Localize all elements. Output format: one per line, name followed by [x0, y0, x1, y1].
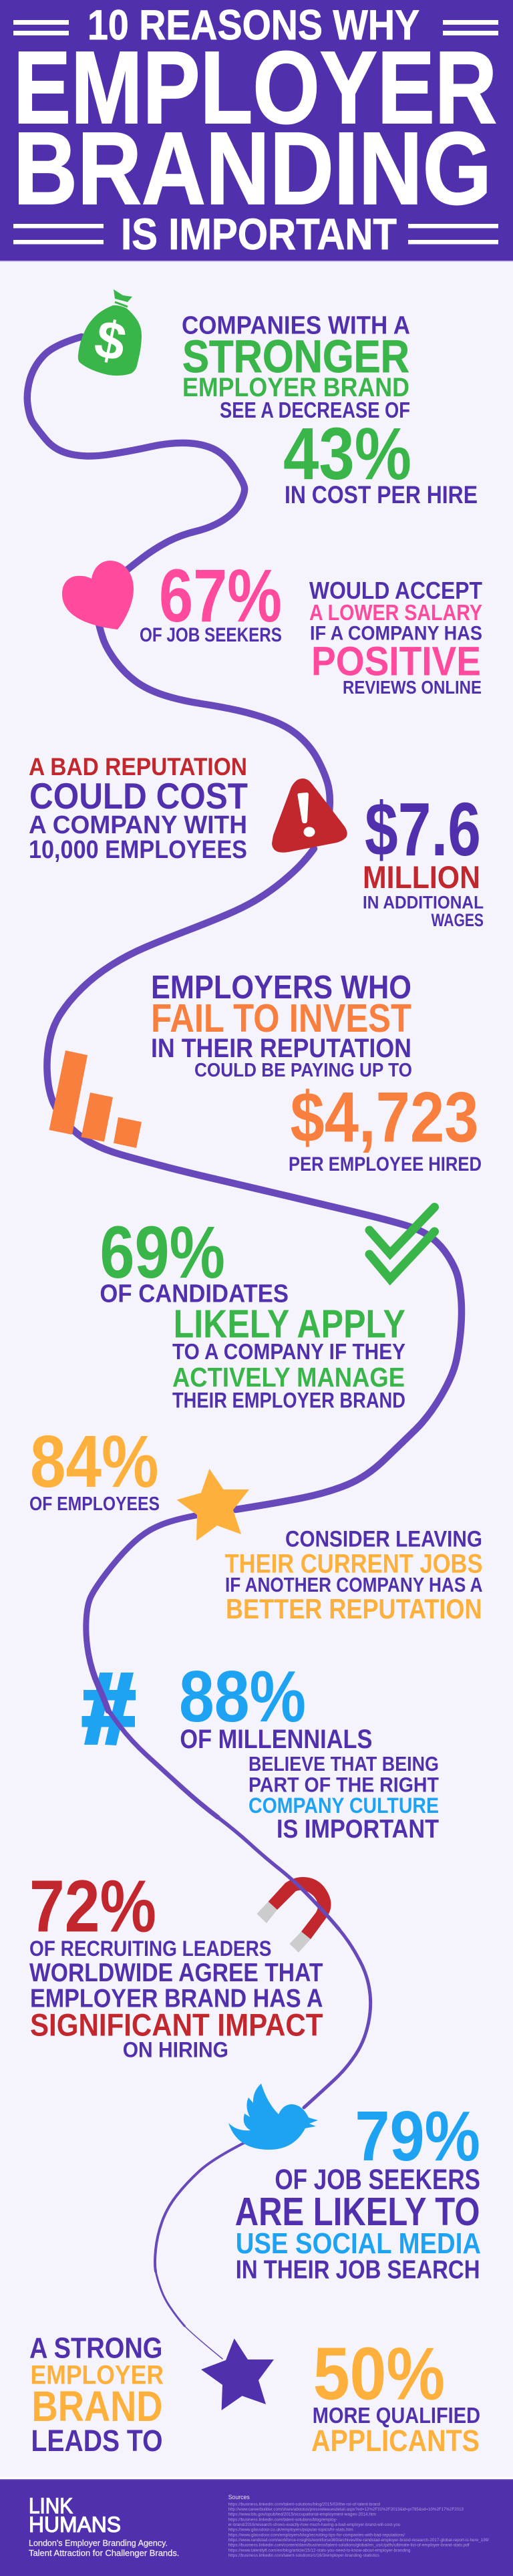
- text: applicants: APPLICANTS: [311, 2424, 480, 2458]
- sources list: https://business.linkedin.com/talent-solutions/c/16/3/employer-branding-statistics: [228, 2553, 380, 2558]
- text: a lower salary: A LOWER SALARY: [309, 600, 482, 625]
- text: would accept: WOULD ACCEPT: [309, 577, 482, 604]
- text: of job seekers: OF JOB SEEKERS: [140, 624, 282, 646]
- text: part of the right: PART OF THE RIGHT: [248, 1773, 439, 1797]
- decorative title bars top: [13, 20, 498, 35]
- sources list: https://business.linkedin.com/talent-solutions/blog/2015/03/the-roi-of-talent-brand: [228, 2502, 380, 2507]
- reason 1 text block: [182, 311, 478, 509]
- sources list: https://www.bls.gov/opub/ted/2015/occupational-employment-wages-2014.htm: [228, 2513, 376, 2517]
- reason 10 text block: [29, 2333, 480, 2458]
- text: in their reputation: IN THEIR REPUTATION: [151, 1034, 411, 1063]
- text: employers who: EMPLOYERS WHO: [151, 970, 411, 1006]
- text: more qualified: MORE QUALIFIED: [313, 2404, 480, 2428]
- text: brand: BRAND: [32, 2382, 163, 2430]
- sources list: https://www.glassdoor.co.uk/employers/popular-topics/hr-stats.htm: [228, 2528, 353, 2533]
- text: better reputation: BETTER REPUTATION: [226, 1593, 482, 1624]
- heading line: 10 reasons why: 10 REASONS WHY: [88, 2, 419, 49]
- icon: money bag: [78, 289, 142, 376]
- tagline: Talent Attraction for Challenger Brands.: [29, 2548, 179, 2558]
- tagline: London's Employer Branding Agency.: [29, 2538, 168, 2548]
- text: could be paying up to: COULD BE PAYING UP TO: [194, 1060, 412, 1081]
- text: companies with a: COMPANIES WITH A: [182, 311, 410, 339]
- text: employer: EMPLOYER: [31, 2361, 164, 2390]
- text: of employees: OF EMPLOYEES: [29, 1493, 160, 1515]
- logo: link humans: LINK: [29, 2494, 73, 2518]
- text: million: MILLION: [363, 860, 480, 895]
- text: in additional: IN ADDITIONAL: [363, 893, 484, 913]
- reason 8 text block: [29, 1866, 323, 2061]
- header banner: [0, 0, 513, 262]
- sources list: https://www.randstad.com/workforce-insights/workforce360/archives/the-randstad-employer-brand-research-2017-global-report-is-here_199/: [228, 2538, 489, 2543]
- text: likely apply: LIKELY APPLY: [174, 1302, 405, 1346]
- reason 3 text block: [29, 753, 484, 930]
- stat: 84%: 84%: [30, 1421, 159, 1503]
- footer band: [0, 2477, 513, 2576]
- text: of millennials: OF MILLENNIALS: [180, 1725, 372, 1754]
- stat: 72%: 72%: [29, 1866, 156, 1948]
- sources list: http://www.careerbuilder.com/share/aboutus/pressreleasesdetail.aspx?ed=12%2F31%2F2013&id=pr785&sd=10%2F17%2F2013: [228, 2507, 464, 2512]
- sources list: https://business.linkedin.com/talent-solutions/blog/employ-: [228, 2517, 337, 2522]
- stat: 67%: 67%: [159, 554, 282, 637]
- icon: twitter bird: [228, 2084, 318, 2150]
- icon: money bag: $: [90, 308, 131, 373]
- text: believe that being: BELIEVE THAT BEING: [248, 1752, 439, 1775]
- icon: magnet: [256, 1877, 331, 1953]
- reason 9 text block: [235, 2097, 481, 2285]
- text: if a company has: IF A COMPANY HAS: [310, 623, 482, 644]
- text: a company with: A COMPANY WITH: [29, 811, 247, 839]
- text: leads to: LEADS TO: [31, 2424, 163, 2458]
- logo: link humans: HUMANS: [29, 2513, 121, 2537]
- text: wages: WAGES: [432, 910, 484, 930]
- reason 4 text block: [151, 970, 482, 1175]
- icon: double check mark: [369, 1207, 434, 1279]
- stat: 79%: 79%: [355, 2097, 480, 2176]
- reason 5 text block: [100, 1211, 405, 1413]
- text: stronger: STRONGER: [182, 331, 409, 382]
- text: is important: IS IMPORTANT: [277, 1815, 439, 1844]
- text: reviews online: REVIEWS ONLINE: [343, 677, 482, 698]
- text: employer brand has a: EMPLOYER BRAND HAS A: [30, 1985, 323, 2013]
- stat: 50%: 50%: [313, 2333, 445, 2416]
- reason 6 text block: [29, 1421, 482, 1624]
- icon: falling bar chart: [49, 1050, 142, 1148]
- text: use social media: USE SOCIAL MEDIA: [236, 2228, 481, 2260]
- icon: star amber: [176, 1469, 249, 1541]
- decorative title bars bottom: [13, 224, 498, 245]
- sources list: https://business.linkedin.com/content/dam/business/talent-solutions/global/en_us/c/pdfs/ultimate-list-of-employer-brand-stats.pdf: [228, 2543, 470, 2548]
- text: significant impact: SIGNIFICANT IMPACT: [30, 2007, 323, 2042]
- text: fail to invest: FAIL TO INVEST: [151, 996, 411, 1040]
- reason 7 text block: [179, 1656, 439, 1844]
- text: positive: POSITIVE: [311, 639, 481, 684]
- sources list: https://www.glassdoor.com/employers/blog/recruiting-tips-for-companies-with-bad-reputations/: [228, 2533, 405, 2537]
- stat: 69%: 69%: [100, 1211, 225, 1294]
- text: actively manage: ACTIVELY MANAGE: [172, 1362, 405, 1393]
- tagline: [29, 2538, 179, 2558]
- icon: star purple: [201, 2339, 274, 2410]
- text: see a decrease of: SEE A DECREASE OF: [220, 398, 410, 422]
- text: on hiring: ON HIRING: [123, 2037, 228, 2061]
- text: company culture: COMPANY CULTURE: [248, 1794, 439, 1818]
- stat: $7.6: $7.6: [365, 787, 481, 871]
- stat: 43%: 43%: [283, 413, 411, 495]
- stat: $4,723: $4,723: [290, 1077, 478, 1157]
- text: worldwide agree that: WORLDWIDE AGREE THAT: [29, 1959, 323, 1987]
- heading line: is important: IS IMPORTANT: [121, 209, 397, 259]
- text: in cost per hire: IN COST PER HIRE: [285, 481, 478, 509]
- stat: 88%: 88%: [179, 1656, 306, 1737]
- icon: heart: [62, 561, 134, 629]
- text: their employer brand: THEIR EMPLOYER BRAND: [172, 1389, 405, 1413]
- text: of recruiting leaders: OF RECRUITING LEADERS: [29, 1937, 271, 1961]
- sources list: [228, 2494, 489, 2558]
- winding path connecting the reasons: [27, 337, 462, 2359]
- text: a strong: A STRONG: [29, 2333, 162, 2365]
- text: of candidates: OF CANDIDATES: [100, 1280, 289, 1308]
- text: a bad reputation: A BAD REPUTATION: [29, 753, 247, 780]
- logo: link humans: [29, 2494, 121, 2537]
- sources list: Sources: [228, 2494, 250, 2500]
- reason 2 text block: [140, 554, 482, 698]
- sources list: er-brand/2016/research-shows-exactly-how-much-having-a-bad-employer-brand-will-cost-you: [228, 2523, 401, 2527]
- text: consider leaving: CONSIDER LEAVING: [285, 1527, 482, 1552]
- text: 10,000 employees: 10,000 EMPLOYEES: [29, 836, 247, 864]
- text: employer brand: EMPLOYER BRAND: [182, 373, 409, 402]
- icon: hashtag: [81, 1673, 136, 1745]
- icon: warning triangle: [272, 778, 347, 853]
- text: to a company if they: TO A COMPANY IF THEY: [172, 1339, 405, 1364]
- text: could cost: COULD COST: [29, 775, 248, 817]
- text: per employee hired: PER EMPLOYEE HIRED: [289, 1153, 482, 1175]
- sources list: https://www.talentlyft.com/en/blog/article/15/12-stats-you-need-to-know-about-employer-branding: [228, 2548, 411, 2553]
